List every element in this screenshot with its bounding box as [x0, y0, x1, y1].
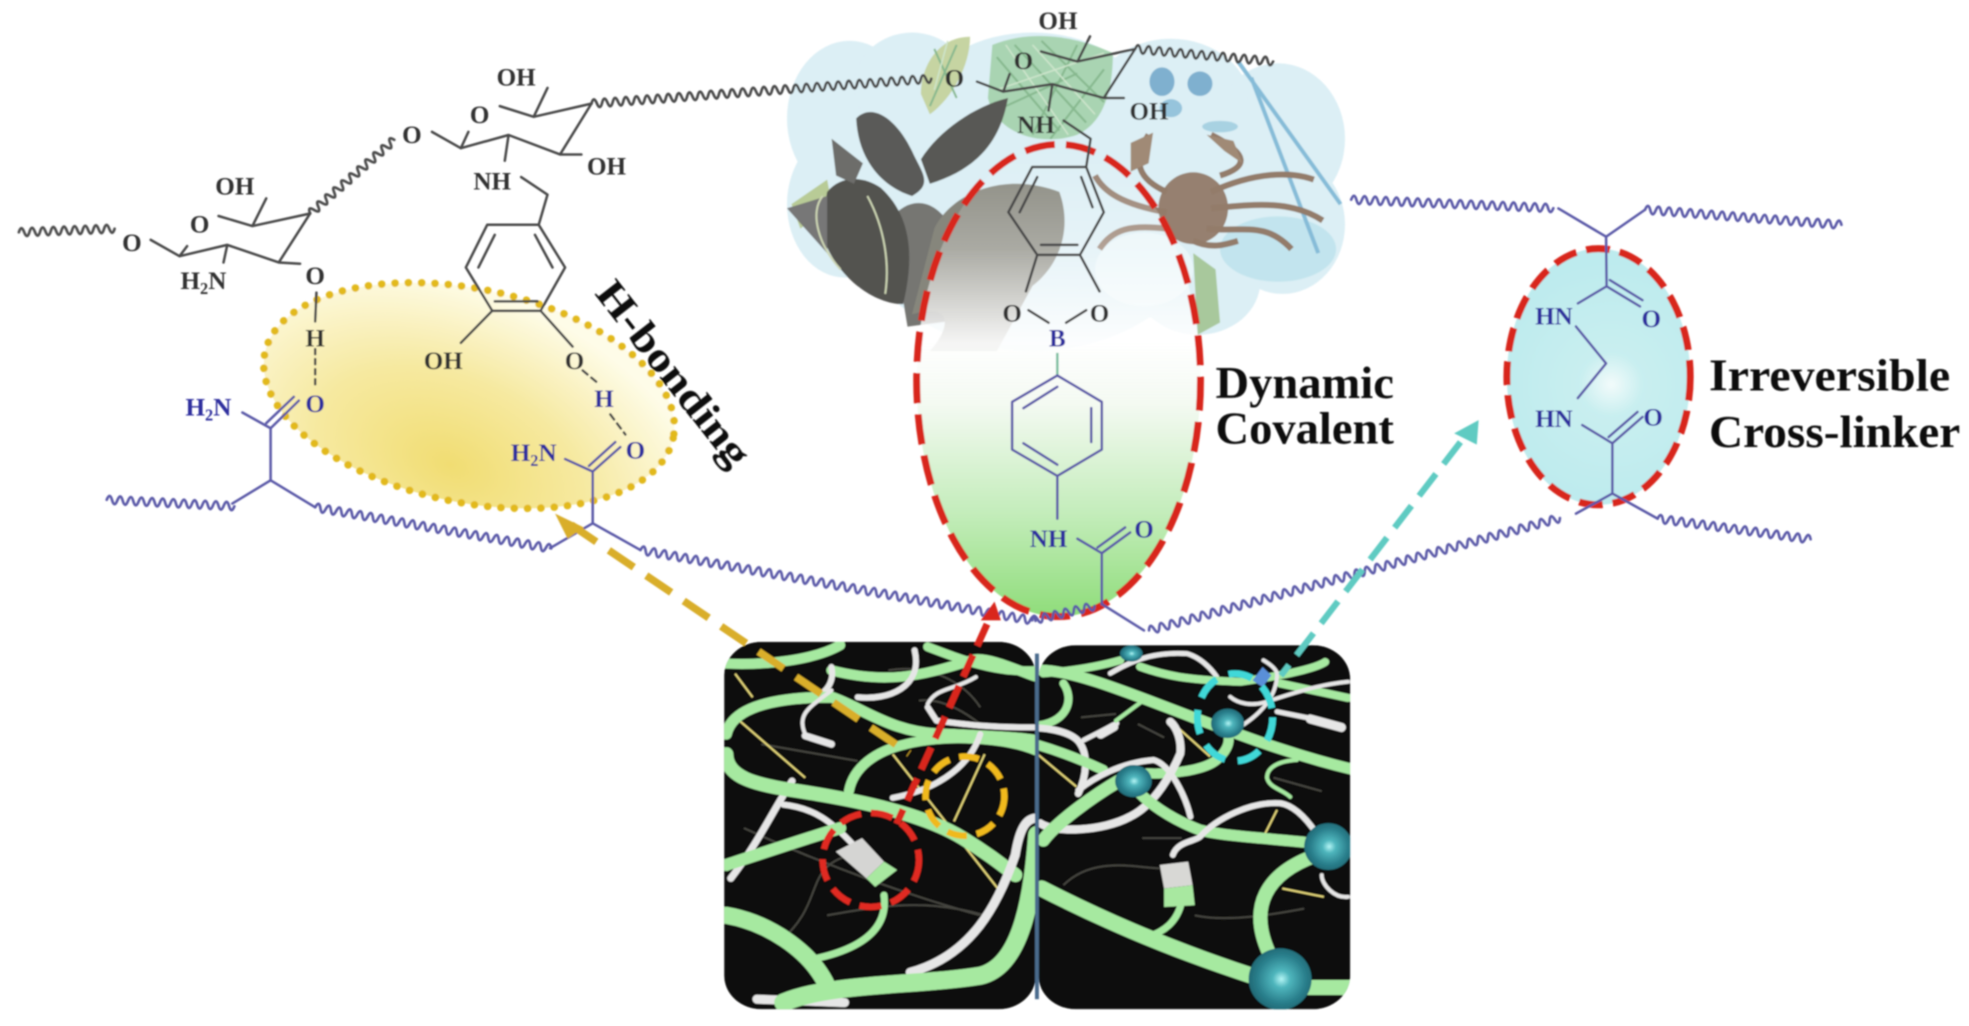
yellow dashed arrow to H-bonding	[555, 514, 909, 753]
boron and phenyl amide linker: O	[1134, 516, 1154, 543]
chitosan unit 1 with labels: O	[305, 263, 325, 290]
chitosan unit 3 with boronate ester: OH	[1129, 98, 1169, 125]
chitosan unit 2 with catechol ring	[402, 64, 627, 375]
chitosan unit 2 with catechol ring: OH	[497, 64, 536, 91]
boron and phenyl amide linker	[1012, 326, 1154, 604]
blue coral branches	[1149, 61, 1341, 253]
right polymer chains and irreversible cross-linker: O	[1642, 306, 1661, 333]
hydrogen bond 1	[305, 293, 325, 388]
cloud illustration: mussels, algae and crab	[787, 33, 1345, 351]
chitosan unit 3 with boronate ester: NH	[1017, 112, 1055, 139]
chitosan unit 3 with boronate ester	[945, 8, 1169, 327]
hydrogen bond 1: H	[305, 326, 325, 353]
network panels	[724, 642, 1352, 1010]
polyacrylamide chain with amide groups: N	[213, 395, 231, 422]
teal dashed ring marker	[1197, 674, 1273, 761]
polyacrylamide chain with amide groups: H	[511, 440, 530, 467]
blue linker marker	[1253, 667, 1271, 687]
hydrogen bond 2: H	[594, 386, 614, 413]
left network panel	[724, 642, 1037, 1009]
polyacrylamide chain with amide groups: O	[305, 391, 325, 418]
label: Irreversible Cross-linker: Irreversible	[1709, 351, 1950, 401]
red dashed ellipse: irreversible cross-linker region	[1507, 249, 1690, 505]
right polymer chains and irreversible cross-linker: O	[1643, 405, 1663, 432]
right network panel	[1020, 645, 1352, 1010]
polyacrylamide chain with amide groups: N	[538, 440, 557, 467]
polyacrylamide chain with amide groups	[107, 391, 645, 553]
label: H-bonding: H-bonding	[587, 271, 761, 476]
yellow dashed ring marker	[926, 757, 1004, 836]
chitosan unit 2 with catechol ring: OH	[424, 348, 463, 375]
right polymer chains and irreversible cross-linker	[1351, 196, 1842, 543]
red dashed arrow to dynamic covalent	[897, 602, 1001, 824]
teal cross-link spheres	[1115, 645, 1352, 1010]
chitosan unit 2 with catechol ring: O	[470, 102, 489, 129]
middle polymer chain	[640, 514, 1561, 634]
polyacrylamide chain with amide groups: 2	[530, 451, 538, 470]
teal dashed arrow to cross-linker	[1281, 420, 1479, 676]
boron and phenyl amide linker: B	[1049, 326, 1066, 353]
connector block	[836, 838, 897, 887]
chitosan unit 3 with boronate ester: O	[1090, 300, 1109, 327]
chitosan unit 2 with catechol ring: O	[565, 348, 584, 375]
mussels	[787, 98, 1065, 351]
red dashed ellipse: dynamic covalent region	[917, 144, 1200, 617]
chitosan unit 3 with boronate ester: O	[1002, 300, 1022, 327]
polyacrylamide chain with amide groups: O	[626, 437, 645, 464]
label: Dynamic Covalent: Dynamic	[1216, 358, 1394, 408]
right panel divider line	[1035, 654, 1039, 999]
polyacrylamide chain with amide groups: H	[186, 395, 205, 422]
crab	[1095, 133, 1323, 249]
right polymer chains and irreversible cross-linker: HN	[1535, 406, 1573, 433]
right polymer chains and irreversible cross-linker: HN	[1535, 304, 1573, 331]
chitosan unit 1 with labels	[122, 174, 325, 298]
hydrogen bond 2	[583, 370, 625, 435]
chitosan unit 1 with labels: 2	[200, 279, 208, 298]
chitosan unit 3 with boronate ester: OH	[1038, 8, 1078, 35]
label: Irreversible Cross-linker: Cross-linker	[1709, 407, 1960, 457]
chitosan chain wavy backbone	[19, 45, 1273, 236]
polyacrylamide chain with amide groups: 2	[205, 406, 213, 425]
chitosan unit 1 with labels: O	[190, 211, 209, 238]
red dashed ring marker	[823, 813, 919, 907]
cloud background	[787, 33, 1345, 351]
chitosan unit 2 with catechol ring: OH	[587, 154, 627, 181]
chitosan unit 1 with labels: H	[181, 268, 200, 295]
yellow dotted ellipse: H-bonding region	[243, 249, 695, 543]
chitosan unit 1 with labels: O	[122, 230, 142, 257]
label: Dynamic Covalent: Covalent	[1216, 403, 1394, 453]
chitosan unit 1 with labels: OH	[215, 174, 255, 201]
algae	[791, 36, 1220, 335]
chitosan unit 3 with boronate ester: O	[1014, 48, 1033, 75]
chitosan unit 1 with labels: N	[208, 268, 226, 295]
boron and phenyl amide linker: NH	[1030, 526, 1068, 553]
chitosan unit 3 with boronate ester: O	[945, 66, 964, 93]
chitosan unit 2 with catechol ring: NH	[473, 169, 512, 196]
chitosan unit 2 with catechol ring: O	[402, 122, 422, 149]
connector block	[1160, 862, 1195, 907]
